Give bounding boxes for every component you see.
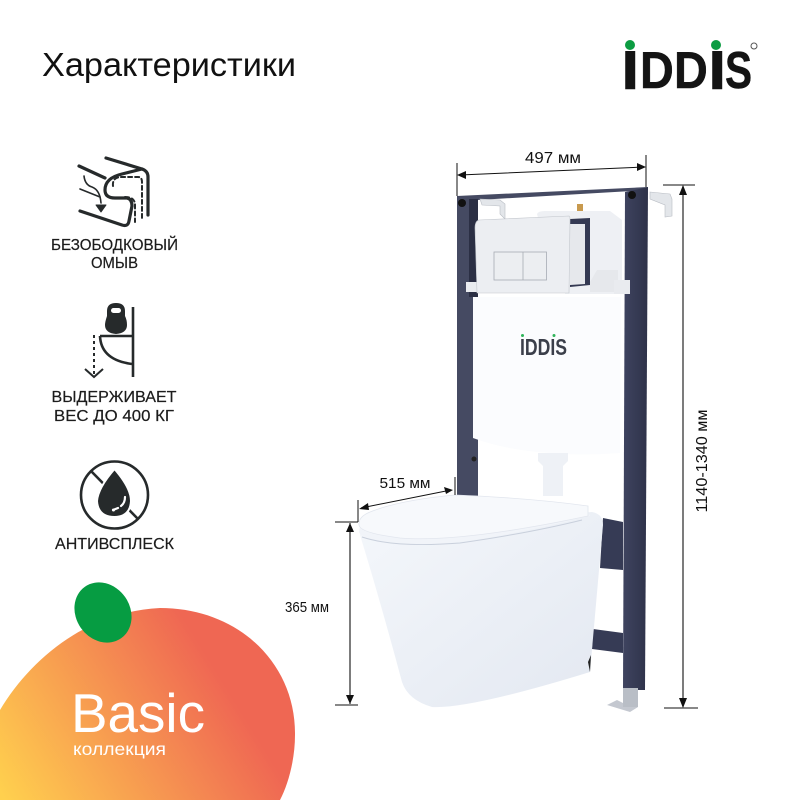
icon: anti-splash: [81, 462, 148, 528]
logo: IDDIS: D: [674, 42, 708, 100]
feature label: load: ВЫДЕРЖИВАЕТ: [52, 389, 177, 406]
logo: IDDIS: S: [725, 41, 752, 99]
product: flush plate: [475, 216, 570, 293]
feature label: load line 2: ВЕС ДО 400 КГ: [54, 408, 174, 425]
panel: collection blob: [0, 608, 295, 800]
collection name: Basic: [71, 682, 205, 744]
feature label: anti-splash: АНТИВСПЛЕСК: [55, 536, 175, 553]
feature label: rimless: БЕЗОБОДКОВЫЙ: [51, 235, 178, 254]
icon: load 400 kg: [85, 303, 133, 377]
product: installation frame: [457, 187, 672, 712]
dimension: height 1140-1340: [663, 185, 711, 708]
product: toilet bowl: [359, 495, 603, 707]
dimension: width 497: 497 мм: [525, 150, 581, 167]
logo: IDDIS: [623, 40, 757, 100]
panel logo: IDDIS: [520, 334, 567, 360]
logo: IDDIS: I: [710, 42, 724, 100]
green accent: [63, 571, 143, 654]
feature label: rimless line 2: ОМЫВ: [91, 255, 138, 272]
product: cistern mechanism: [466, 204, 630, 294]
dimension: depth 515: [358, 475, 455, 522]
dimension: height 365: [285, 522, 358, 705]
title: Характеристики: [42, 46, 296, 83]
toilet seat: [359, 512, 590, 545]
dimension: height 1140-1340: 1140-1340 мм: [694, 410, 711, 512]
collection caption: коллекция: [73, 739, 166, 759]
logo: IDDIS: I: [623, 42, 637, 100]
dimension: width 497: [457, 150, 646, 196]
drain pipe: [538, 453, 568, 496]
logo: IDDIS: D: [640, 42, 674, 100]
dimension: height 365: 365 мм: [285, 599, 329, 616]
icon: rimless flush: [79, 158, 148, 226]
product: cistern panel: [473, 297, 621, 496]
dimension: depth 515: 515 мм: [380, 475, 430, 492]
